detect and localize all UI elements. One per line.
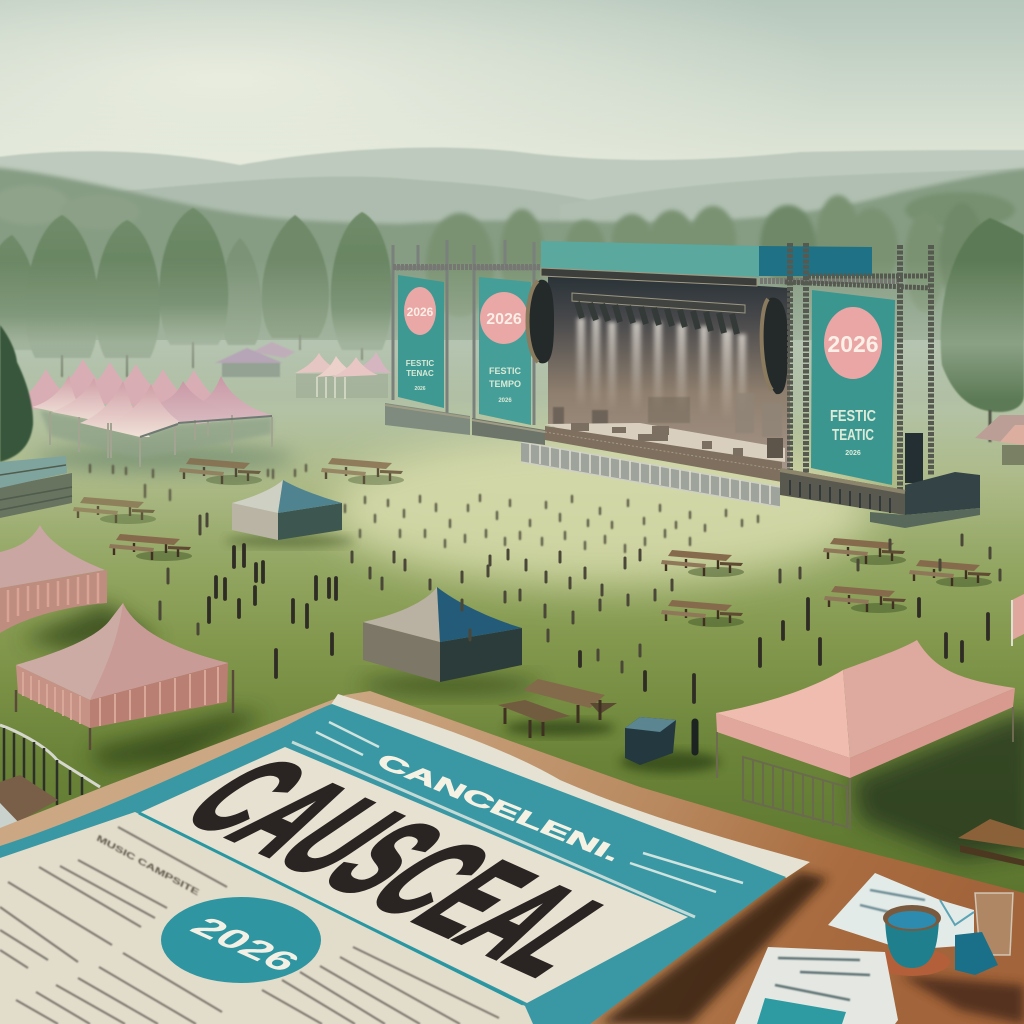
article text lines <box>0 827 499 1024</box>
right edge pink tent <box>1012 594 1024 646</box>
left banner: TENAC <box>406 369 434 378</box>
pale rule <box>292 742 695 917</box>
stage back wall <box>548 272 790 475</box>
left platforms <box>385 403 545 445</box>
roof teal panel <box>541 241 759 277</box>
water glass <box>975 893 1013 955</box>
picnic tables <box>73 458 992 627</box>
newspaper shadow <box>600 872 828 1024</box>
pink canopy right <box>716 640 1015 830</box>
barricade fence <box>521 442 780 507</box>
teal rule <box>139 813 523 1004</box>
right line array speaker <box>762 298 788 394</box>
near crowd <box>209 545 988 702</box>
metal fence right <box>743 757 847 827</box>
centre left banner: TEMPO <box>489 379 521 389</box>
right tower dark box <box>905 433 980 515</box>
sky <box>0 0 1024 260</box>
right large tree <box>941 218 1024 442</box>
middle pink tents <box>295 352 392 399</box>
brown fence base and white block <box>0 775 58 832</box>
centre left banner: FESTIC <box>489 366 521 376</box>
stage <box>385 240 980 528</box>
bin and person <box>625 717 695 765</box>
pink tent front left small <box>0 525 107 633</box>
newspaper <box>0 694 810 1024</box>
tent shade underneath <box>40 410 272 458</box>
main right banner: 2026 <box>845 450 861 457</box>
main right banner: FESTIC <box>830 408 876 425</box>
truss connector <box>393 267 900 281</box>
metal fence left <box>0 725 100 805</box>
centre left banner <box>479 277 531 425</box>
grey tent mid field <box>232 480 342 540</box>
stage monitors <box>571 423 783 458</box>
right distant tents <box>975 415 1024 465</box>
pink tent cluster left <box>10 359 272 467</box>
left body <box>0 812 533 1024</box>
front row tents <box>32 375 272 437</box>
forest tree line <box>0 167 1024 380</box>
paper white strip <box>330 694 810 878</box>
right towers <box>785 243 931 495</box>
band gear on stage <box>553 393 782 437</box>
lighting truss <box>572 293 745 334</box>
coffee cup <box>874 905 950 976</box>
left tower frame <box>392 240 540 425</box>
left banner: FESTIC <box>406 359 434 368</box>
shadow under pink tents <box>35 444 295 472</box>
tent legs <box>50 412 272 467</box>
brochure <box>735 947 898 1024</box>
2026 badge: 2026 <box>181 911 310 977</box>
haze band over forest <box>0 260 1024 400</box>
teal cover <box>0 704 786 1024</box>
crowd people <box>90 465 1000 702</box>
right platform <box>780 468 980 528</box>
sky glow <box>0 0 1024 260</box>
left viewing platform <box>0 456 72 518</box>
pink tent front left large <box>16 603 233 750</box>
front truss <box>541 268 757 286</box>
left line array speaker <box>528 280 554 363</box>
left tree group <box>0 208 392 377</box>
main right banner: 2026 <box>827 331 879 357</box>
ground shadows <box>20 535 1024 860</box>
left banner: 2026 <box>407 305 434 319</box>
centre left banner: 2026 <box>498 398 512 404</box>
centre left banner: 2026 <box>486 311 522 328</box>
left banner <box>398 275 444 408</box>
blue box <box>955 932 998 975</box>
roof blue panel <box>759 246 872 276</box>
headline box <box>139 747 688 1003</box>
loose papers on desk <box>828 873 974 950</box>
2026 badge <box>161 897 321 983</box>
dark foreground tree <box>0 325 33 462</box>
main right banner: TEATIC <box>832 427 874 444</box>
decorative band lines <box>316 722 743 892</box>
distant purple tents <box>215 342 295 377</box>
main right banner <box>811 290 895 485</box>
desk cast shadow <box>900 975 1024 1024</box>
wooden desk <box>0 691 1024 1024</box>
light beams <box>577 318 746 420</box>
field light glow <box>330 435 870 585</box>
left banner: 2026 <box>414 386 426 392</box>
stage deck <box>545 423 785 462</box>
back trees <box>426 195 984 317</box>
far crowd <box>90 465 758 552</box>
distant hills <box>0 148 1024 270</box>
mid crowd <box>160 514 1000 672</box>
band title: CANCELENI. <box>372 749 626 866</box>
article heading text: MUSIC CAMPSITE <box>95 834 200 897</box>
large foreground table <box>498 679 617 738</box>
dark blue tent <box>363 587 522 682</box>
back row tents <box>10 359 230 410</box>
field <box>0 340 1024 970</box>
right foreground bench <box>958 819 1024 866</box>
